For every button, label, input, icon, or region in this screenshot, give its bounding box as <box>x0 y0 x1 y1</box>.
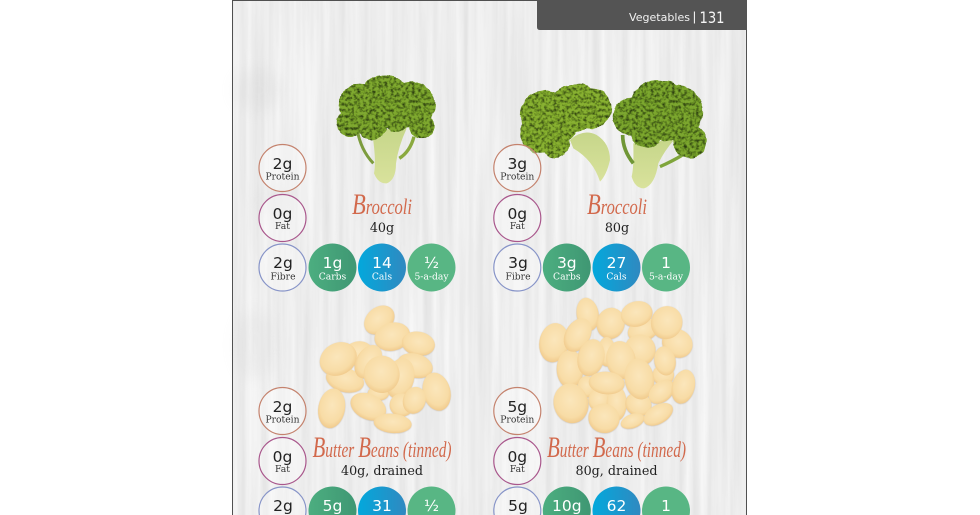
panel: butter beans 80g nutrition <box>494 388 690 515</box>
calories badge: Cals <box>606 272 627 282</box>
5-a-day badge: ½ <box>424 254 439 272</box>
image: butter beans 40g <box>314 300 455 435</box>
fat badge: 0g <box>507 448 527 466</box>
carbs badge: 3g <box>557 254 577 272</box>
header tab: Vegetables 131 <box>537 0 747 30</box>
5-a-day badge: 5-a-day <box>414 272 449 282</box>
fat badge: 0g <box>507 205 527 223</box>
header tab: Vegetables 131: | <box>693 9 696 24</box>
5-a-day badge: 1 <box>661 254 671 272</box>
fibre badge: Fibre <box>505 272 531 282</box>
calories badge: Cals <box>372 272 392 282</box>
heading: Broccoli: Broccoli <box>352 188 412 221</box>
image: broccoli 40g <box>337 75 435 183</box>
5-a-day badge: 5-a-day <box>649 272 684 282</box>
calories badge: 31 <box>372 497 392 515</box>
heading: Broccoli: Broccoli <box>587 188 647 221</box>
protein badge: Protein <box>500 414 534 426</box>
5-a-day badge <box>408 244 456 292</box>
fibre badge <box>494 487 541 515</box>
fibre badge: 2g <box>273 497 293 515</box>
carbs badge <box>543 486 591 515</box>
carbs badge: Carbs <box>553 272 581 282</box>
heading: Butter Beans (tinned): Butter Beans (tinned) <box>547 431 686 464</box>
fat badge: Fat <box>510 221 525 232</box>
protein badge <box>494 388 541 434</box>
protein badge <box>259 144 306 192</box>
carbs badge: 1g <box>323 254 342 272</box>
carbs badge <box>308 486 356 515</box>
protein badge: 3g <box>507 155 527 173</box>
protein badge: Protein <box>265 172 300 182</box>
5-a-day badge <box>642 486 690 515</box>
carbs badge <box>543 244 591 292</box>
portion: 40g, drained: 40g, drained <box>341 463 423 478</box>
fibre badge: 5g <box>508 497 528 515</box>
fat badge <box>259 194 306 242</box>
fat badge: 0g <box>273 448 292 466</box>
fat badge <box>494 438 541 484</box>
protein badge <box>259 388 306 434</box>
fibre badge: Fibre <box>270 272 296 282</box>
protein badge: Protein <box>500 172 534 182</box>
fat badge: Fat <box>275 221 290 232</box>
panel: wood background <box>232 0 747 515</box>
header tab: Vegetables 131: 131 <box>700 8 724 27</box>
calories badge <box>358 244 406 292</box>
image: butter beans 80g <box>536 296 699 437</box>
portion: 80g, drained: 80g, drained <box>576 463 657 478</box>
fat badge <box>259 438 306 484</box>
image: broccoli 80g <box>520 80 707 188</box>
fat badge: Fat <box>275 464 290 475</box>
header tab: Vegetables 131: Vegetables <box>629 11 690 24</box>
protein badge: 5g <box>507 398 527 416</box>
protein badge: 2g <box>273 155 292 173</box>
fibre badge <box>494 244 541 291</box>
protein badge: 2g <box>273 398 292 416</box>
5-a-day badge: 1 <box>661 497 671 515</box>
5-a-day badge <box>642 244 690 292</box>
calories badge: 14 <box>372 254 392 272</box>
carbs badge <box>308 244 356 292</box>
carbs badge: Carbs <box>319 272 347 282</box>
panel: broccoli 40g nutrition <box>259 144 456 292</box>
calories badge: 62 <box>607 497 626 515</box>
fat badge: 0g <box>273 205 292 223</box>
fibre badge: 3g <box>508 254 528 272</box>
5-a-day badge <box>408 486 456 515</box>
carbs badge: 10g <box>552 497 582 515</box>
fat badge: Fat <box>510 464 525 475</box>
fibre badge: 2g <box>273 254 293 272</box>
protein badge <box>494 144 541 192</box>
panel: broccoli 80g nutrition <box>494 144 690 292</box>
fat badge <box>494 194 541 242</box>
fibre badge <box>259 487 306 515</box>
calories badge: 27 <box>607 254 626 272</box>
calories badge <box>592 486 640 515</box>
portion: 40g: 40g <box>370 220 394 235</box>
fibre badge <box>259 244 306 291</box>
panel: butter beans 40g nutrition <box>259 388 456 515</box>
5-a-day badge: ½ <box>424 497 439 515</box>
carbs badge: 5g <box>323 497 342 515</box>
calories badge <box>358 486 406 515</box>
portion: 80g: 80g <box>605 220 629 235</box>
calories badge <box>592 244 640 292</box>
heading: Butter Beans (tinned): Butter Beans (tinned) <box>312 431 452 464</box>
protein badge: Protein <box>265 414 300 426</box>
